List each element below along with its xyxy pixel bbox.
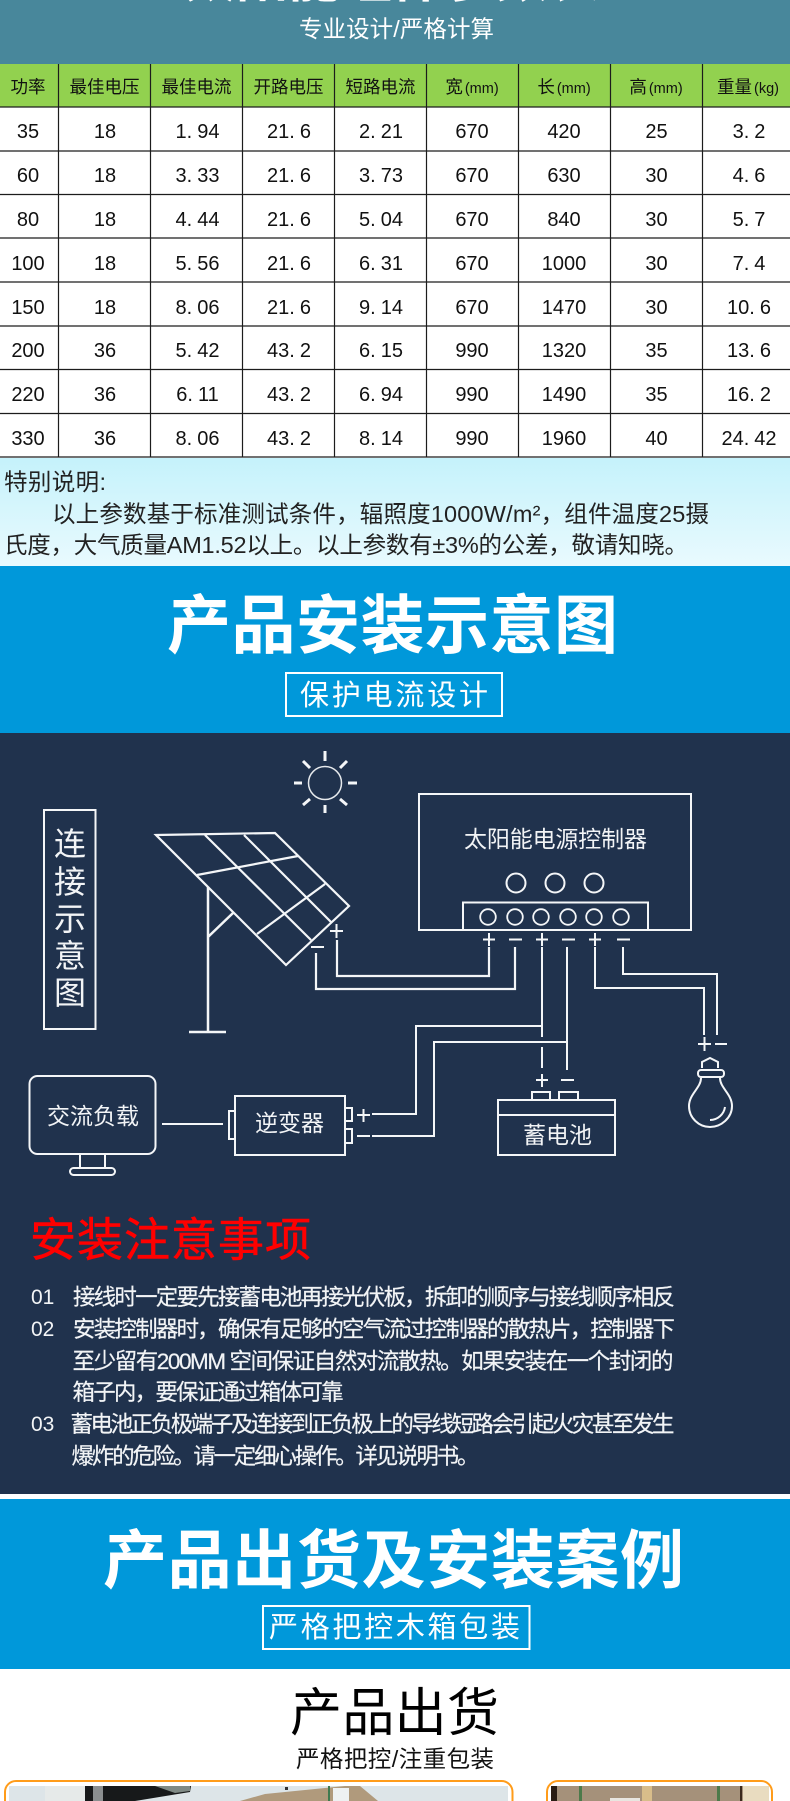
- note 02: 安装控制器时，确保有足够的空气流过控制器的散热片，控制器下: [73, 1317, 675, 1342]
- row 35: 25: [645, 121, 668, 143]
- row 35: [17, 121, 765, 143]
- table header row: [0, 64, 790, 107]
- panel: special note: 氏度，大气质量AM1.52以上。以上参数有±3%的公差，敬请知晓。: [4, 532, 688, 558]
- row 80: 18: [94, 209, 116, 231]
- label: connection diagram: [44, 810, 96, 1029]
- AC load monitor: [30, 1076, 156, 1175]
- label: connection diagram: 意: [54, 938, 86, 974]
- row 200: 1320: [542, 340, 586, 362]
- row 35: 35: [17, 121, 39, 143]
- row 330: 990: [455, 428, 489, 450]
- row 80: 4.44: [176, 209, 219, 231]
- wire: load to inverter: [162, 1123, 223, 1125]
- subheading: 严格把控/注重包装: [296, 1746, 494, 1772]
- tag box: 严格把控木箱包装: [269, 1611, 520, 1644]
- row 220: 43.2: [267, 384, 311, 406]
- tag box: 保护电流设计: [300, 679, 488, 712]
- panel: special note: [0, 458, 790, 566]
- row 330: 24.42: [721, 428, 777, 450]
- row 60: [17, 165, 765, 187]
- table header row: 最佳电压: [70, 77, 140, 97]
- row 35: 670: [455, 121, 489, 143]
- heading: 产品出货及安装案例: [103, 1525, 684, 1597]
- row 220: 6.94: [359, 384, 403, 406]
- row 60: 3.73: [359, 165, 403, 187]
- row 80: 670: [455, 209, 489, 231]
- row 330: 40: [645, 428, 668, 450]
- row 60: 60: [17, 165, 39, 187]
- inverter: [229, 1096, 370, 1155]
- row 100: [11, 253, 765, 275]
- wires: panel to controller: [316, 940, 515, 989]
- row 220: 16.2: [727, 384, 771, 406]
- table header row: 长(mm): [537, 77, 591, 97]
- photo: shipment right: [547, 1781, 772, 1801]
- row 100: 30: [645, 253, 668, 275]
- row 100: 6.31: [359, 253, 403, 275]
- banner: shipping and installation cases heading: [0, 1499, 790, 1669]
- row 35: 21.6: [267, 121, 311, 143]
- table body: [11, 121, 777, 450]
- label: connection diagram: 接: [54, 864, 86, 900]
- row 220: 220: [11, 384, 45, 406]
- label: connection diagram: 图: [54, 975, 86, 1011]
- row 80: 5.7: [733, 209, 765, 231]
- table header row: 功率: [10, 77, 46, 97]
- wires: battery and inverter: [372, 947, 567, 1136]
- row 80: [17, 209, 765, 231]
- row 80: 80: [17, 209, 39, 231]
- row 150: 9.14: [359, 297, 403, 319]
- row 200: [11, 340, 771, 362]
- row 330: 1960: [542, 428, 586, 450]
- label: connection diagram: 示: [54, 901, 86, 937]
- icon: light bulb: [689, 1037, 732, 1127]
- row 80: 840: [547, 209, 581, 231]
- note 02: 至少留有200MM 空间保证自然对流散热。如果安装在一个封闭的: [72, 1349, 674, 1374]
- table header row: 开路电压: [254, 77, 324, 97]
- row 80: 5.04: [359, 209, 403, 231]
- label: connection diagram: 连: [54, 826, 86, 862]
- row 200: 6.15: [359, 340, 403, 362]
- row 150: 18: [94, 297, 116, 319]
- row 60: 4.6: [733, 165, 765, 187]
- tag box: [286, 673, 502, 716]
- row 200: 200: [11, 340, 45, 362]
- row 330: 8.06: [176, 428, 219, 450]
- row 200: 990: [455, 340, 489, 362]
- icon: sun: [294, 751, 357, 813]
- notes list: [31, 1285, 675, 1469]
- row 330: 36: [94, 428, 116, 450]
- panel: special note: 特别说明:: [4, 469, 106, 495]
- note 02: [31, 1317, 675, 1405]
- row 35: 18: [94, 121, 116, 143]
- row 60: 30: [645, 165, 668, 187]
- row 330: 330: [11, 428, 45, 450]
- row 35: 420: [547, 121, 581, 143]
- row 100: 18: [94, 253, 116, 275]
- table header row: 短路电流: [346, 77, 416, 97]
- note 01: 接线时一定要先接蓄电池再接光伏板，拆卸的顺序与接线顺序相反: [73, 1285, 675, 1310]
- row 100: 1000: [542, 253, 586, 275]
- heading: installation notes: 安装注意事项: [30, 1214, 311, 1266]
- panel: dark diagram and notes: [0, 733, 790, 1494]
- note 03: 爆炸的危险。请一定细心操作。详见说明书。: [72, 1444, 480, 1469]
- note 02: 箱子内，要保证通过箱体可靠: [72, 1380, 344, 1405]
- polarity marks: [483, 933, 630, 946]
- note 02: 02: [31, 1318, 54, 1341]
- row 150: 8.06: [176, 297, 219, 319]
- header: parameter table title band: [0, 0, 790, 64]
- row 220: 990: [455, 384, 489, 406]
- row 80: 30: [645, 209, 668, 231]
- row 150: 30: [645, 297, 668, 319]
- AC load monitor: 交流负载: [47, 1103, 139, 1129]
- row 200: 43.2: [267, 340, 311, 362]
- row 35: 3.2: [733, 121, 765, 143]
- row 200: 5.42: [176, 340, 219, 362]
- controller label: 太阳能电源控制器: [464, 826, 647, 852]
- row 220: 6.11: [176, 384, 219, 406]
- table header row: 最佳电流: [162, 77, 232, 97]
- row 60: 630: [547, 165, 581, 187]
- row 220: [11, 384, 771, 406]
- subtitle: 专业设计/严格计算: [299, 16, 494, 42]
- heading: 产品安装示意图: [167, 590, 618, 662]
- row 60: 670: [455, 165, 489, 187]
- row 150: 670: [455, 297, 489, 319]
- row 150: 21.6: [267, 297, 311, 319]
- photo: shipment left: [5, 1781, 512, 1801]
- wires: load: [595, 947, 717, 1035]
- battery: [498, 1074, 615, 1155]
- note 03: [31, 1412, 674, 1469]
- row 220: 36: [94, 384, 116, 406]
- note 03: 03: [31, 1413, 54, 1436]
- row 100: 100: [11, 253, 45, 275]
- note 01: 01: [31, 1286, 54, 1309]
- row 330: 8.14: [359, 428, 403, 450]
- row 35: 1.94: [176, 121, 219, 143]
- terminals: [480, 909, 629, 925]
- row 150: 10.6: [727, 297, 771, 319]
- battery: 蓄电池: [523, 1122, 592, 1148]
- heading: product shipping: 产品出货: [290, 1685, 499, 1743]
- indicator lights: [506, 874, 604, 892]
- row 60: 21.6: [267, 165, 311, 187]
- solar controller: [419, 794, 691, 946]
- note 03: 蓄电池正负极端子及连接到正负极上的导线短路会引起火灾甚至发生: [70, 1412, 674, 1437]
- table header row: 宽(mm): [445, 77, 499, 97]
- row 220: 35: [645, 384, 668, 406]
- row 330: 43.2: [267, 428, 311, 450]
- row 200: 36: [94, 340, 116, 362]
- row 60: 3.33: [176, 165, 219, 187]
- row 80: 21.6: [267, 209, 311, 231]
- row 330: [11, 428, 777, 450]
- panel: special note: 以上参数基于标准测试条件，辐照度1000W/m²，组件温度25摄: [52, 501, 709, 527]
- parameter table: [0, 64, 790, 457]
- table header row: 重量(kg): [717, 77, 779, 97]
- banner: installation diagram heading: [0, 566, 790, 733]
- row 100: 7.4: [733, 253, 765, 275]
- row 200: 35: [645, 340, 668, 362]
- row 150: [11, 297, 771, 319]
- row 35: 2.21: [359, 121, 403, 143]
- row 220: 1490: [542, 384, 586, 406]
- inverter: 逆变器: [255, 1110, 324, 1136]
- row 200: 13.6: [727, 340, 771, 362]
- row 150: 1470: [542, 297, 586, 319]
- row 100: 21.6: [267, 253, 311, 275]
- row 100: 670: [455, 253, 489, 275]
- row 60: 18: [94, 165, 116, 187]
- table header row: 高(mm): [629, 77, 683, 97]
- solar panel: [156, 833, 349, 1032]
- row 100: 5.56: [176, 253, 219, 275]
- row 150: 150: [11, 297, 45, 319]
